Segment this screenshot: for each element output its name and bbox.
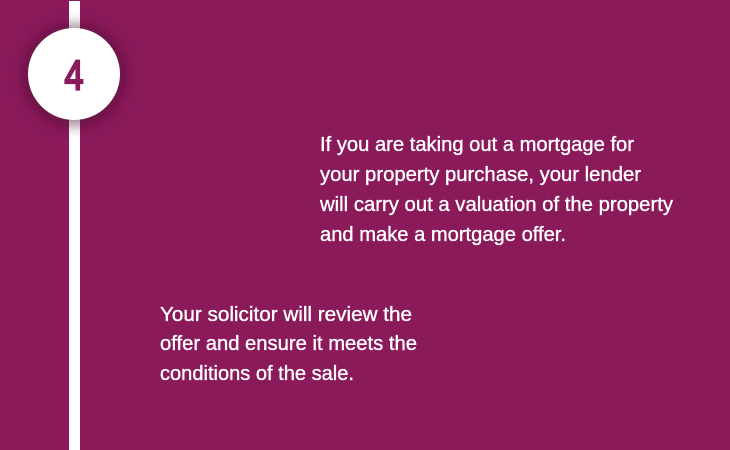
step number: 4 [64,52,84,98]
text block: mortgage valuation: will carry out a valuation of the property [319,194,673,216]
text block: solicitor review [160,304,417,385]
text block: mortgage valuation [319,134,673,246]
text block: solicitor review: conditions of the sale. [160,363,354,385]
text block: solicitor review: Your solicitor will review the [160,304,412,326]
text block: mortgage valuation: If you are taking out a mortgage for [320,134,634,156]
timeline bar [69,1,80,450]
text block: mortgage valuation: your property purchase, your lender [320,164,641,186]
text block: solicitor review: offer and ensure it meets the [160,333,417,355]
step number badge [25,26,123,124]
text block: mortgage valuation: and make a mortgage offer. [320,224,566,246]
